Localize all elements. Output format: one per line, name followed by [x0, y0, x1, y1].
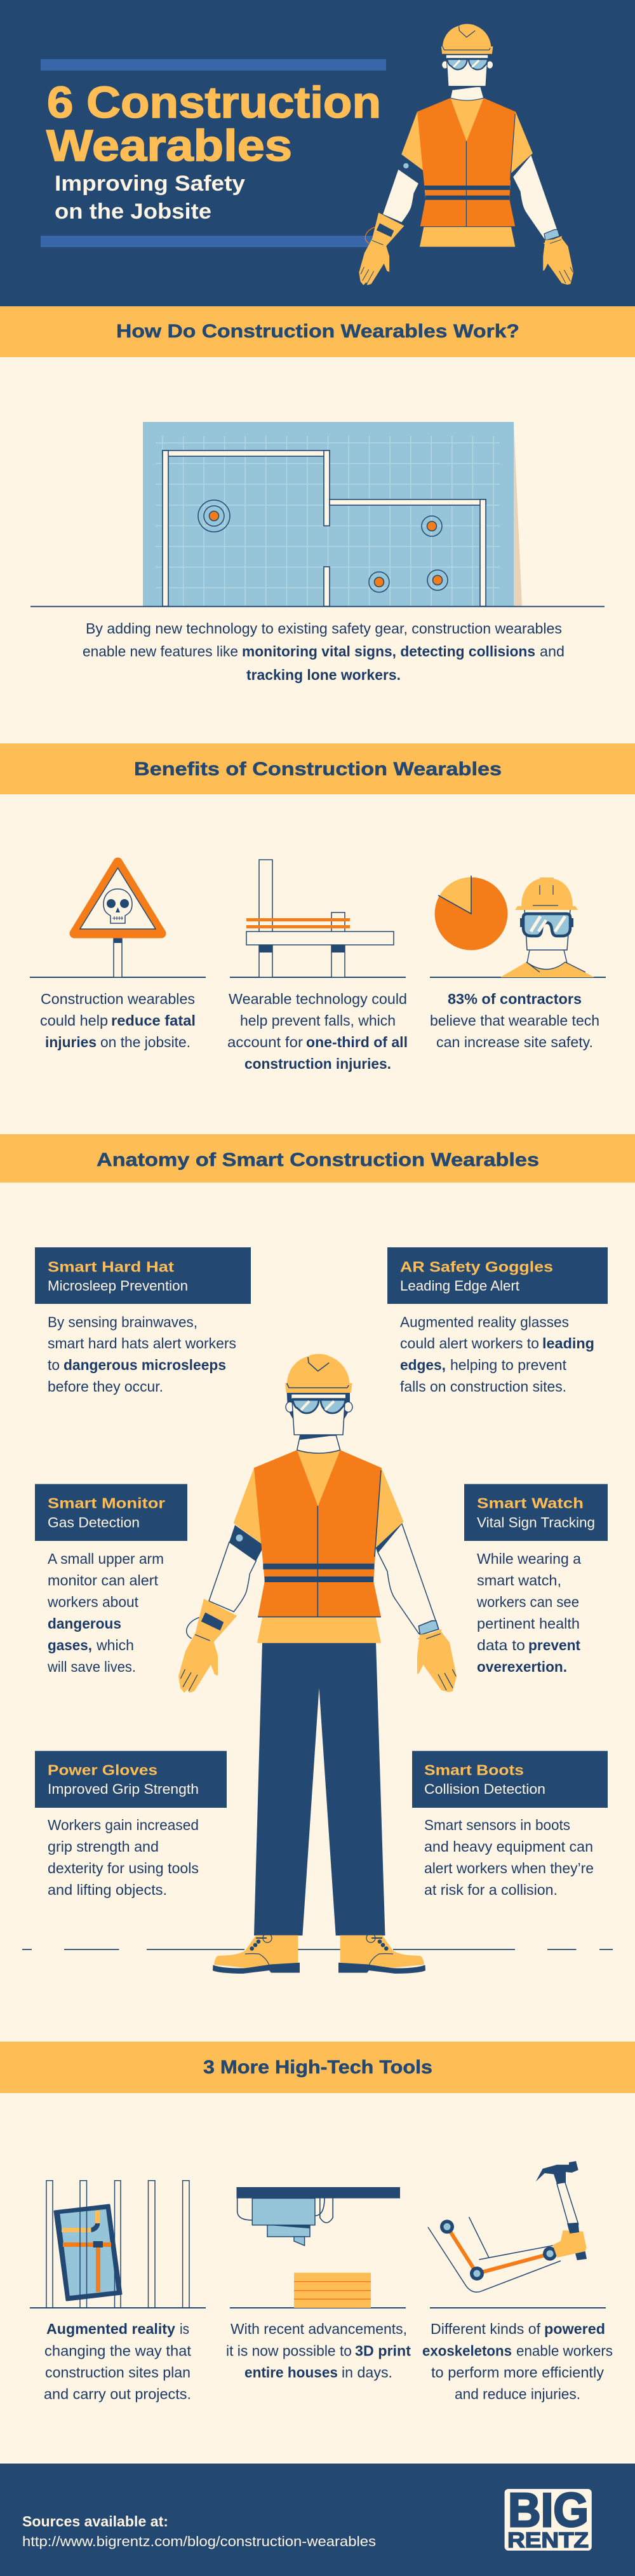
- safety goggles: [292, 1399, 345, 1413]
- body text: falls on construction sites.: [400, 1378, 566, 1395]
- subtitle: [55, 172, 245, 224]
- smart monitor armband: [229, 1525, 262, 1561]
- body text: before they occur.: [48, 1378, 163, 1395]
- caption: changing the way that: [44, 2343, 192, 2359]
- callout: smart boots: Collision Detection: [424, 1781, 545, 1797]
- panel: footer: [0, 2464, 635, 2576]
- floor line behind worker: [22, 1949, 613, 1950]
- callout: power gloves: Power Gloves: [48, 1761, 157, 1778]
- section band: high-tech tools: [0, 2042, 635, 2093]
- callout: power gloves: [35, 1751, 227, 1898]
- callout: smart hard hat: Smart Hard Hat: [48, 1258, 174, 1275]
- section band: how do construction wearables work: How Do Construction Wearables Work?: [116, 321, 519, 342]
- sources text: Sources available at:: [22, 2513, 168, 2530]
- body text: dangerous: [48, 1615, 121, 1632]
- body text: leading: [542, 1335, 594, 1352]
- intro text: enable new features like: [83, 643, 238, 660]
- caption: injuries: [45, 1034, 97, 1050]
- left arm: [209, 1542, 256, 1611]
- worker upper body: [178, 1354, 457, 1693]
- pie chart: 83%: [435, 876, 507, 950]
- caption: construction injuries.: [244, 1055, 391, 1072]
- sources text: http://www.bigrentz.com/blog/construction-wearables: [22, 2533, 376, 2549]
- panel: benefit prevent falls: [227, 860, 408, 1072]
- body text: workers can see: [476, 1594, 579, 1610]
- body text: [47, 1550, 164, 1675]
- body text: will save lives.: [47, 1658, 136, 1675]
- body text: smart watch,: [477, 1572, 561, 1589]
- caption: 3D print: [355, 2343, 411, 2359]
- caption: With recent advancements,: [231, 2321, 407, 2337]
- top accent bar: [41, 59, 386, 71]
- caption: [226, 2321, 411, 2381]
- bottom accent bar: [41, 236, 375, 247]
- section band: high-tech tools: 3 More High-Tech Tools: [203, 2057, 432, 2078]
- caption: exoskeletons: [422, 2343, 512, 2359]
- sources text: [22, 2513, 376, 2549]
- caption: Augmented reality: [46, 2321, 175, 2337]
- body text: By sensing brainwaves,: [48, 1314, 197, 1331]
- caption: [422, 2321, 613, 2403]
- body text: could alert workers to: [400, 1335, 539, 1352]
- intro text: [83, 620, 565, 683]
- face: [292, 1400, 345, 1435]
- body text: Augmented reality glasses: [400, 1314, 569, 1331]
- body text: helping to prevent: [450, 1357, 567, 1373]
- caption: it is now possible to: [226, 2343, 352, 2359]
- power glove, left: [178, 1599, 237, 1693]
- icon: exoskeleton arm with hammer: [428, 2161, 606, 2308]
- caption: could help: [40, 1012, 108, 1029]
- panel: 3D printing: [226, 2187, 411, 2381]
- title: [46, 78, 381, 170]
- caption: on the jobsite.: [100, 1034, 190, 1050]
- caption: powered: [544, 2321, 605, 2337]
- body text: and lifting objects.: [48, 1881, 167, 1898]
- vest: [254, 1450, 382, 1617]
- caption: reduce fatal: [111, 1012, 196, 1029]
- section band: anatomy: [0, 1134, 635, 1183]
- location marker: lower right: [427, 570, 448, 590]
- caption: [430, 991, 599, 1050]
- icon: 3D printer and house wall: [230, 2187, 406, 2308]
- section band: how do construction wearables work: [0, 306, 635, 357]
- icon: tablet over wall studs: [30, 2181, 206, 2308]
- body text: prevent: [528, 1637, 580, 1653]
- callout: AR safety goggles: Leading Edge Alert: [400, 1278, 519, 1294]
- body text: at risk for a collision.: [424, 1881, 558, 1898]
- caption: and reduce injuries.: [455, 2386, 580, 2403]
- panel: augmented reality: [30, 2181, 206, 2403]
- caption: account for: [227, 1034, 303, 1050]
- icon: warning sign with skull: [30, 862, 206, 977]
- panel: hero header: [0, 0, 635, 306]
- caption: can increase site safety.: [436, 1034, 593, 1050]
- sleeves and shirt: [234, 1450, 404, 1643]
- body text: Workers gain increased: [48, 1817, 199, 1833]
- smart watch: [418, 1621, 439, 1635]
- section band: benefits: [0, 743, 635, 794]
- callout: AR safety goggles: [387, 1247, 608, 1395]
- body text: grip strength and: [48, 1838, 159, 1855]
- boot, left: [213, 1934, 300, 1974]
- caption: Construction wearables: [41, 991, 195, 1007]
- body text: alert workers when they’re: [424, 1860, 594, 1876]
- intro text: monitoring vital signs, detecting collisions: [242, 643, 535, 660]
- caption: is: [180, 2321, 189, 2337]
- worker anatomy figure: [178, 1354, 457, 1974]
- caption: [44, 2321, 192, 2403]
- blueprint illustration: [30, 422, 605, 606]
- callout: smart boots: [412, 1751, 608, 1898]
- subtitle: on the Jobsite: [55, 200, 211, 224]
- callout: smart boots: Smart Boots: [424, 1761, 524, 1778]
- boot, right: [338, 1934, 425, 1974]
- body text: data to: [477, 1637, 525, 1653]
- hard hat: [285, 1354, 352, 1393]
- body text: A small upper arm: [48, 1550, 164, 1567]
- caption: one-third of all: [306, 1034, 408, 1050]
- glove, right: [417, 1629, 457, 1692]
- location marker: right: [422, 516, 442, 536]
- callout: power gloves: Improved Grip Strength: [48, 1781, 199, 1797]
- callout: smart monitor: [35, 1484, 187, 1675]
- caption: and carry out projects.: [44, 2386, 191, 2403]
- body text: overexertion.: [477, 1658, 567, 1675]
- body text: pertinent health: [477, 1615, 580, 1632]
- intro text: By adding new technology to existing safety gear, construction wearables: [86, 620, 562, 637]
- logo: BigRentz: BIG: [508, 2483, 589, 2537]
- body text: which: [96, 1637, 134, 1653]
- icon: worker head with goggles: [430, 878, 606, 977]
- body text: workers about: [47, 1594, 139, 1610]
- subtitle: Improving Safety: [55, 172, 245, 196]
- body text: to: [48, 1357, 60, 1373]
- callout: smart hard hat: Microsleep Prevention: [48, 1278, 188, 1294]
- caption: to perform more efficiently: [431, 2364, 604, 2381]
- caption: Wearable technology could: [229, 991, 407, 1007]
- icon: scaffold: [230, 860, 406, 977]
- caption: [40, 991, 196, 1050]
- caption: in days.: [342, 2364, 392, 2381]
- callout: smart watch: Smart Watch: [477, 1495, 584, 1512]
- body text: [476, 1550, 581, 1675]
- callout: AR safety goggles: AR Safety Goggles: [400, 1258, 553, 1275]
- title: Wearables: [46, 121, 292, 170]
- caption: entire houses: [244, 2364, 338, 2381]
- title: 6 Construction: [47, 78, 381, 127]
- body text: and heavy equipment can: [424, 1838, 593, 1855]
- body text: Smart sensors in boots: [424, 1817, 570, 1833]
- location marker: lower middle: [369, 572, 389, 592]
- body text: smart hard hats alert workers: [48, 1335, 236, 1352]
- neck: [297, 1435, 340, 1453]
- trousers: [254, 1643, 385, 1935]
- body text: edges,: [400, 1357, 446, 1373]
- body text: dangerous microsleeps: [64, 1357, 226, 1373]
- location marker: large: [198, 500, 230, 532]
- caption: [227, 991, 408, 1072]
- body text: gases,: [48, 1637, 92, 1653]
- body text: [424, 1817, 594, 1898]
- body text: [400, 1314, 594, 1395]
- body text: [48, 1314, 236, 1395]
- intro text: tracking lone workers.: [246, 667, 401, 683]
- callout: smart watch: [464, 1484, 608, 1675]
- panel: exoskeletons: [422, 2161, 613, 2403]
- logo: BigRentz: RENTZ: [507, 2528, 589, 2552]
- callout: smart hard hat: [35, 1247, 251, 1395]
- hair: [287, 1393, 350, 1420]
- caption: help prevent falls, which: [240, 1012, 396, 1029]
- callout: smart monitor: Smart Monitor: [48, 1495, 165, 1512]
- right arm: [378, 1524, 439, 1634]
- caption: believe that wearable tech: [430, 1012, 599, 1029]
- intro text: and: [540, 643, 565, 660]
- section band: benefits: Benefits of Construction Wearables: [134, 759, 502, 780]
- callout: smart monitor: Gas Detection: [48, 1515, 140, 1530]
- section band: anatomy: Anatomy of Smart Construction Wearables: [97, 1149, 539, 1170]
- caption: enable workers: [516, 2343, 613, 2359]
- body text: While wearing a: [477, 1550, 581, 1567]
- body text: monitor can alert: [48, 1572, 159, 1589]
- panel: benefit fatal injuries: [30, 862, 206, 1050]
- hero worker illustration: [359, 24, 573, 285]
- body text: dexterity for using tools: [48, 1860, 199, 1876]
- ears: [286, 1402, 352, 1412]
- caption: construction sites plan: [45, 2364, 190, 2381]
- caption: 83% of contractors: [448, 991, 582, 1007]
- panel: benefit 83 percent: [430, 876, 606, 1050]
- body text: [48, 1817, 199, 1898]
- callout: smart watch: Vital Sign Tracking: [477, 1515, 595, 1530]
- caption: Different kinds of: [431, 2321, 541, 2337]
